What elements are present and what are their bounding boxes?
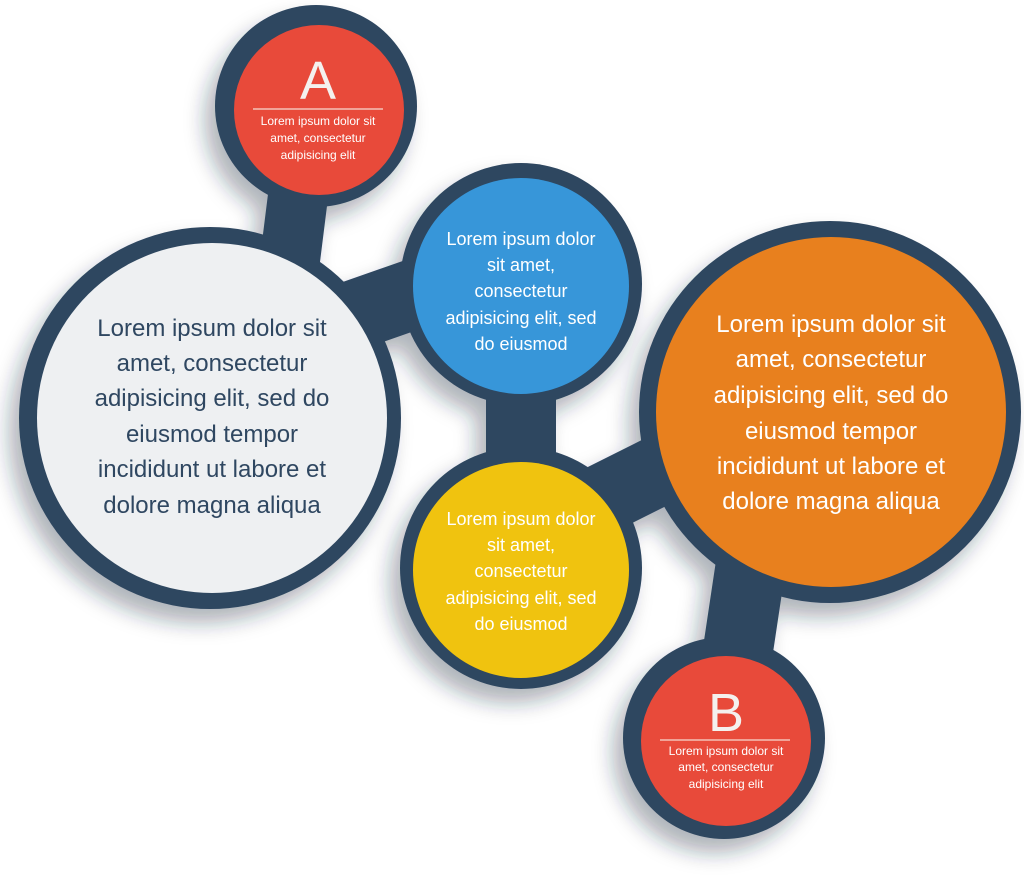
circle: white large: dolore magna aliqua <box>103 492 321 519</box>
circle: yellow: consectetur <box>474 561 568 581</box>
circle: white large <box>37 243 387 593</box>
circle: blue: Lorem ipsum dolor <box>446 229 596 249</box>
circle B: amet, consectetur <box>678 760 774 774</box>
circle A: amet, consectetur <box>270 131 366 145</box>
circle: blue: do eiusmod <box>474 334 568 354</box>
circle B: adipisicing elit <box>689 777 764 791</box>
circle: yellow <box>413 462 629 678</box>
circle: orange large: adipisicing elit, sed do <box>714 382 948 409</box>
circle: orange large <box>656 237 1006 587</box>
circle: blue: adipisicing elit, sed <box>445 308 597 328</box>
circle: white large: eiusmod tempor <box>126 421 298 448</box>
circle A: adipisicing elit <box>281 148 356 162</box>
circle: yellow: adipisicing elit, sed <box>445 588 597 608</box>
circle: orange large: dolore magna aliqua <box>722 488 940 515</box>
circle: white large: adipisicing elit, sed do <box>95 385 329 412</box>
circle: orange large: amet, consectetur <box>736 346 926 373</box>
circle: yellow: Lorem ipsum dolor <box>446 509 596 529</box>
circle: white large: incididunt ut labore et <box>98 456 326 483</box>
circle: blue <box>413 178 629 394</box>
circle: orange large: incididunt ut labore et <box>717 453 945 480</box>
circle: yellow: sit amet, <box>487 535 555 555</box>
circle: white large: amet, consectetur <box>117 350 307 377</box>
circle: white large: Lorem ipsum dolor sit <box>97 315 327 342</box>
circle A: A <box>300 51 336 111</box>
circle B: Lorem ipsum dolor sit <box>669 744 784 758</box>
circle A: Lorem ipsum dolor sit <box>261 114 376 128</box>
circle: yellow: do eiusmod <box>474 614 568 634</box>
circle: orange large: eiusmod tempor <box>745 418 917 445</box>
circle: blue: sit amet, <box>487 255 555 275</box>
circle B: B <box>708 683 744 743</box>
circle B <box>641 656 811 826</box>
circle A <box>234 25 404 195</box>
circle: orange large: Lorem ipsum dolor sit <box>716 311 946 338</box>
circle: blue: consectetur <box>474 281 568 301</box>
